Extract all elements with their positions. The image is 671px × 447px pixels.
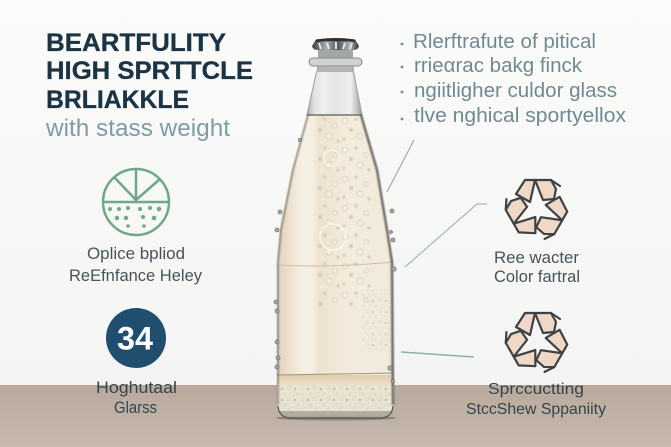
icon label: right bottom: StccShew Sppaniity (466, 401, 606, 418)
neck ring (318, 50, 353, 59)
bottle cap (312, 38, 359, 50)
bottle neck glass (307, 66, 362, 115)
neck shadow (317, 66, 354, 72)
title: HIGH SPRTTCLE (46, 57, 253, 85)
bullet list: Rlerftrafute of pitical (413, 31, 596, 53)
icon: recycle bottom (501, 313, 572, 375)
callout line: middle (405, 204, 487, 267)
icon label: left top: Oplice bpliod (87, 245, 185, 263)
icon label: right top (494, 249, 580, 286)
bullet list: ngiitligher culdor glass (414, 80, 617, 102)
collar (309, 58, 362, 66)
icon label: left top: ReEfnfance Heley (69, 267, 203, 285)
left glass edge (278, 115, 308, 405)
icon label: right top: Ree wacter (494, 249, 580, 267)
droplets on glass (274, 138, 396, 383)
large bubble rings (320, 150, 346, 250)
liquid surface (307, 114, 362, 116)
icon label: right bottom (466, 381, 606, 418)
bullet list (401, 31, 626, 127)
bottle (270, 38, 400, 425)
number badge (106, 308, 166, 368)
right dark glass edge (361, 115, 393, 405)
badge label: Hoghutaal (96, 379, 177, 397)
icon: recycle top (501, 180, 572, 242)
title: BEARTFULITY (46, 29, 226, 57)
badge label (96, 379, 177, 417)
number badge: 34 (117, 320, 153, 356)
table surface (0, 385, 671, 447)
title: BRLIAKKLE (46, 86, 189, 114)
bullet list: rrieαrac bakg finck (414, 55, 583, 77)
icon label: left top (69, 245, 203, 285)
badge label: Glarss (114, 399, 157, 417)
bullet list: tlve nghical sportyellox (414, 105, 626, 127)
subtitle: with stass weight (45, 115, 230, 142)
icon: segmented circle (103, 169, 169, 235)
bottle bottom edge (278, 406, 393, 418)
callout line: upper (387, 140, 414, 192)
callout line: lower (401, 352, 474, 357)
icon label: right top: Color fartral (494, 268, 580, 286)
title (46, 29, 253, 114)
bottle shadow (276, 416, 396, 420)
icon label: right bottom: Sprccuctting (488, 381, 584, 398)
liquid (277, 115, 394, 418)
